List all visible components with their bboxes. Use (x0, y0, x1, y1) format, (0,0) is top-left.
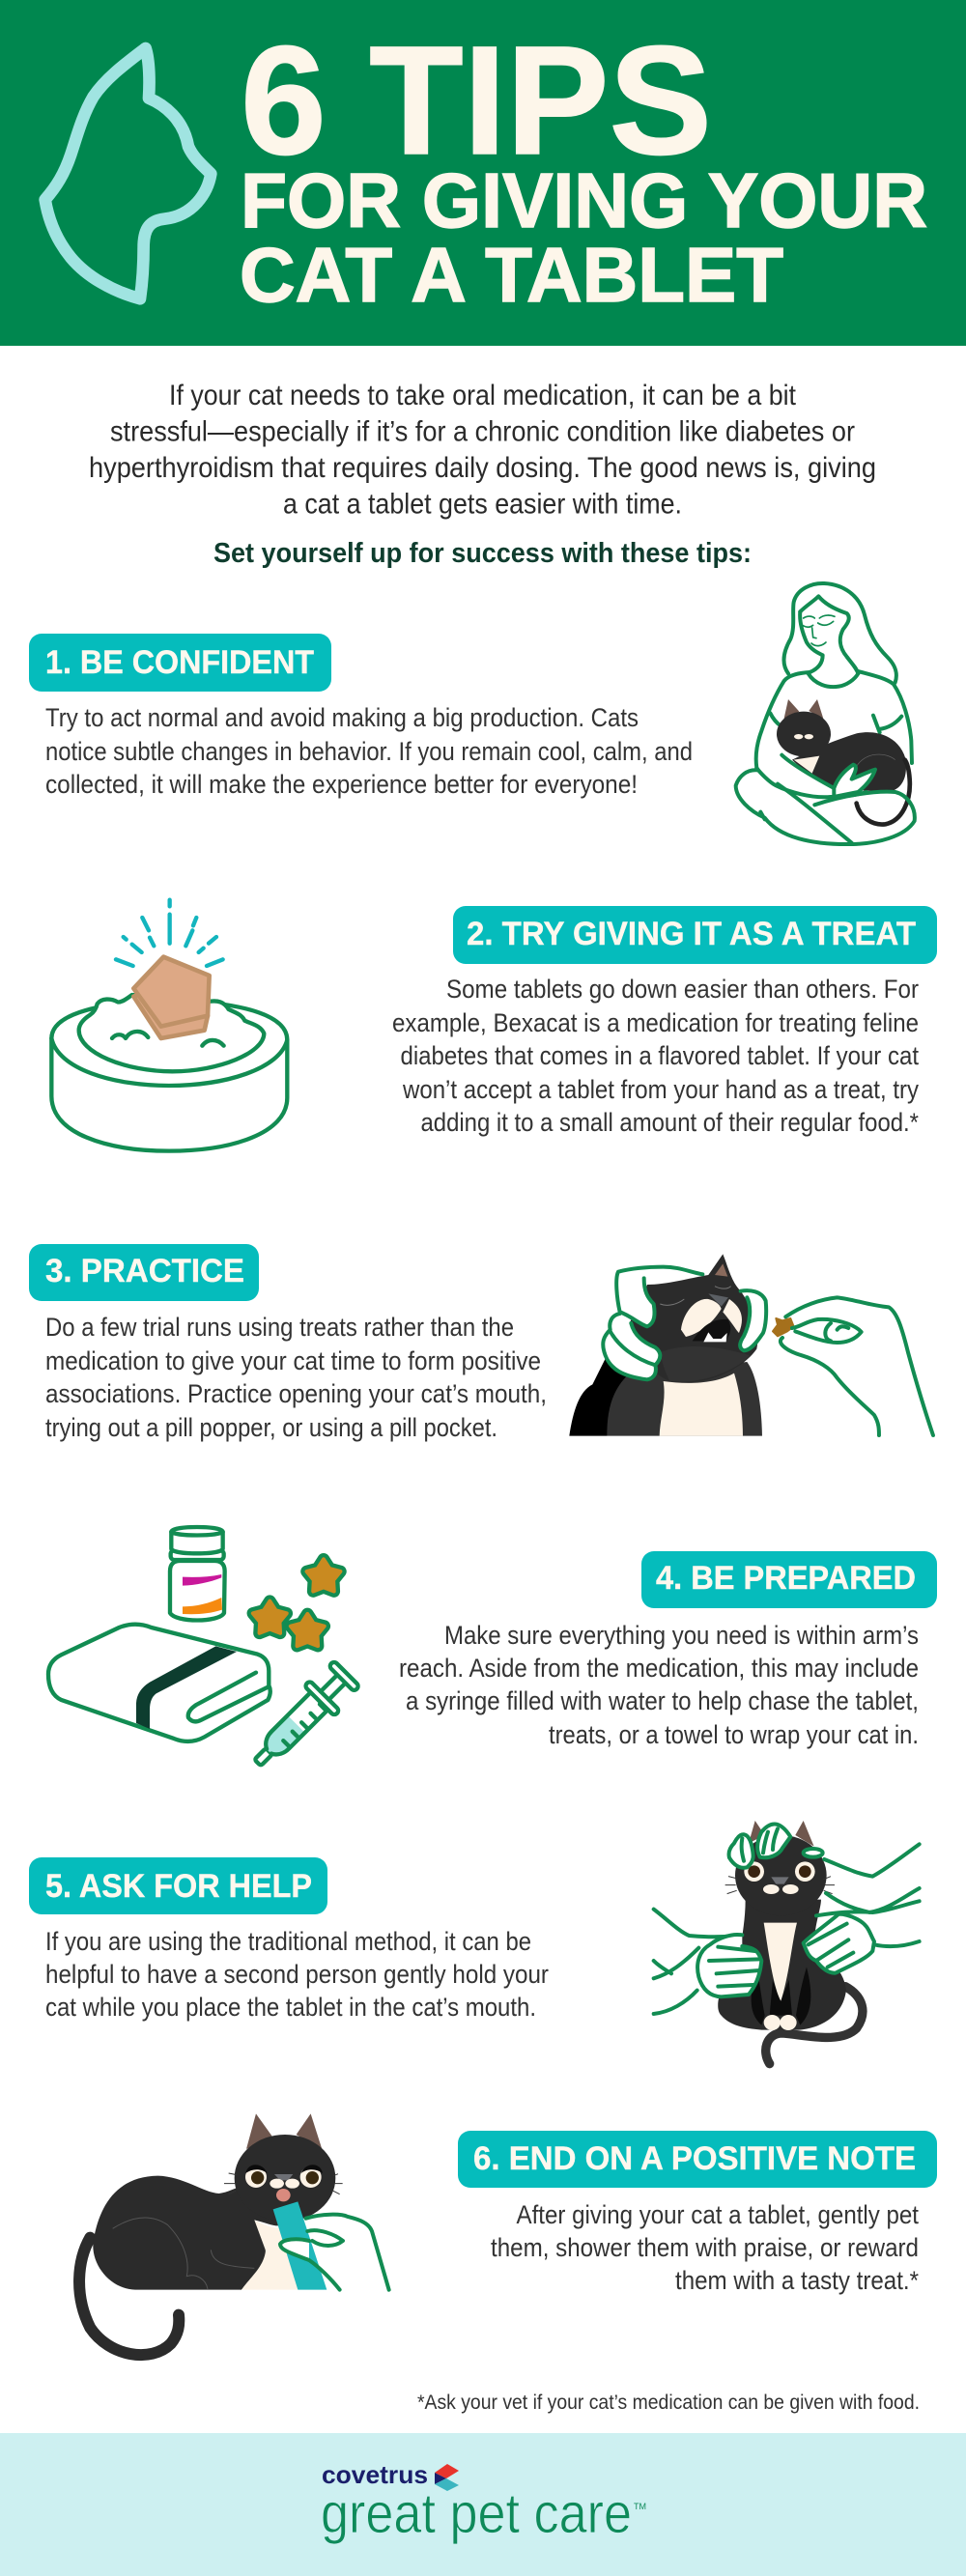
intro text: a cat a tablet gets easier with time. (283, 489, 682, 520)
tip 3 text: medication to give your cat time to form positive (45, 1346, 541, 1375)
top hand (729, 1825, 920, 1877)
subheading: Set yourself up for success with these tips: (213, 538, 752, 569)
title (240, 14, 927, 318)
tip 3 heading (29, 1244, 259, 1301)
title: FOR GIVING YOUR (241, 157, 927, 243)
illustration: hands opening cat mouth (569, 1254, 933, 1436)
tip 3 text (45, 1313, 547, 1442)
tip 4 text: Make sure everything you need is within arm’s (444, 1621, 919, 1650)
tip 2 panel (51, 900, 937, 1151)
tip 5 panel (29, 1821, 920, 2064)
hand (280, 2215, 389, 2290)
tip 1 panel (29, 583, 915, 844)
tip 6 heading (458, 2131, 937, 2188)
tip 3 text: associations. Practice opening your cat’s mouth, (45, 1379, 547, 1408)
tip 4 text: treats, or a towel to wrap your cat in. (549, 1720, 919, 1749)
tip 2 text: diabetes that comes in a flavored tablet. If your cat (400, 1041, 920, 1070)
treats (253, 1559, 340, 1646)
tip 4 text (399, 1621, 919, 1749)
tip 5 heading (29, 1857, 327, 1914)
medicine bottle (170, 1527, 225, 1620)
right hand (804, 1888, 920, 1973)
tip 5 text: If you are using the traditional method, it can be (45, 1927, 531, 1956)
illustration: food bowl with tablet (51, 900, 287, 1151)
title: 6 TIPS (241, 14, 712, 186)
tip 5 text: helpful to have a second person gently hold your (45, 1960, 549, 1989)
tip 1 text (45, 703, 693, 799)
tip 5 text: cat while you place the tablet in the cat’s mouth. (45, 1993, 536, 2022)
icon: covetrus logo (435, 2464, 459, 2491)
icon: cat head outline (45, 48, 211, 298)
tip 3 heading: 3. PRACTICE (45, 1253, 244, 1289)
towel (48, 1625, 270, 1741)
footer band with logo: TM (634, 2502, 646, 2511)
tip 2 text (392, 975, 920, 1137)
tip 5 heading: 5. ASK FOR HELP (45, 1868, 312, 1905)
tip 2 heading (453, 906, 937, 964)
footnote: *Ask your vet if your cat’s medication can be given with food. (417, 2392, 920, 2414)
tip 2 text: adding it to a small amount of their regular food.* (421, 1108, 919, 1137)
tip 1 heading: 1. BE CONFIDENT (45, 644, 314, 681)
tip 2 text: example, Bexacat is a medication for treating feline (392, 1008, 919, 1037)
tip 1 text: notice subtle changes in behavior. If you remain cool, calm, and (45, 737, 693, 766)
tip 5 text (45, 1927, 549, 2022)
tip 6 text: After giving your cat a tablet, gently pet (516, 2200, 920, 2229)
covetrus wordmark: covetrus (322, 2460, 428, 2489)
intro text (89, 380, 876, 520)
tablet (133, 957, 210, 1038)
intro text: stressful—especially if it’s for a chronic condition like diabetes or (110, 415, 855, 448)
illustration: cat licking treat tube (79, 2113, 389, 2355)
tip 3 text: Do a few trial runs using treats rather than the (45, 1313, 514, 1342)
tip 6 text (491, 2200, 920, 2295)
tip 3 text: trying out a pill popper, or using a pill pocket. (45, 1413, 497, 1442)
intro text: If your cat needs to take oral medication, it can be a bit (169, 380, 797, 411)
tip 4 heading: 4. BE PREPARED (656, 1560, 916, 1597)
tip 4 text: reach. Aside from the medication, this may include (399, 1654, 919, 1683)
intro text: hyperthyroidism that requires daily dosing. The good news is, giving (89, 452, 876, 484)
tip 4 panel (48, 1527, 937, 1778)
tip 6 panel (79, 2113, 937, 2355)
tip 1 text: collected, it will make the experience better for everyone! (45, 770, 638, 799)
cat (777, 699, 910, 825)
title: CAT A TABLET (240, 232, 783, 318)
tip 4 text: a syringe filled with water to help chase the tablet, (406, 1686, 919, 1715)
tip 4 heading (641, 1551, 937, 1608)
illustration: two people holding cat (654, 1821, 920, 2064)
illustration: supplies (48, 1527, 362, 1778)
tip 1 text: Try to act normal and avoid making a big production. Cats (45, 703, 639, 732)
illustration: woman holding cat (736, 583, 915, 844)
great pet care wordmark: great pet care (321, 2482, 632, 2545)
treat tube (273, 2201, 327, 2290)
left hand (654, 1910, 761, 2014)
tip 6 text: them with a tasty treat.* (675, 2266, 919, 2295)
tip 2 text: Some tablets go down easier than others. For (446, 975, 919, 1004)
tip 6 text: them, shower them with praise, or reward (491, 2233, 919, 2262)
tip 3 panel (29, 1244, 933, 1442)
syringe (242, 1658, 362, 1778)
sparkle rays (116, 900, 223, 966)
treat (773, 1318, 794, 1336)
header banner (0, 0, 966, 346)
tip 2 heading: 2. TRY GIVING IT AS A TREAT (467, 916, 916, 952)
tip 1 heading (29, 634, 331, 692)
hand with treat (781, 1297, 933, 1435)
tip 2 text: won’t accept a tablet from your hand as a treat, try (402, 1075, 920, 1104)
tip 6 heading: 6. END ON A POSITIVE NOTE (473, 2140, 916, 2177)
footer band with logo (0, 2433, 966, 2576)
hand on cat (834, 765, 875, 797)
